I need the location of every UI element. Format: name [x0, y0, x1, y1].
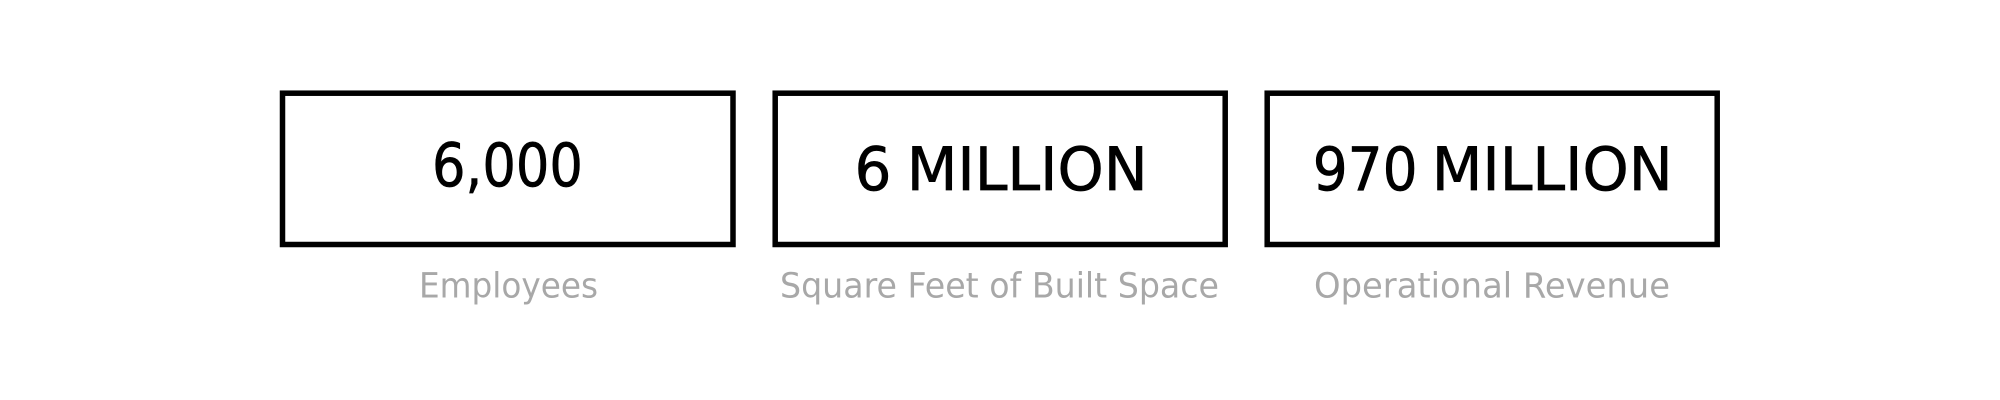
stat box: employees	[282, 93, 733, 244]
stat value: 6 million: 6	[854, 135, 892, 205]
stat box: operational revenue	[1267, 93, 1717, 244]
stat value: 6 million: MILLION	[907, 135, 1148, 205]
stat box: built space	[775, 93, 1225, 244]
stat value: 6,000: 6,000	[432, 131, 583, 201]
panel: built space	[775, 93, 1225, 306]
stat label: operational revenue: Operational Revenue	[1314, 266, 1670, 306]
stat label: employees: Employees	[419, 266, 598, 306]
stat value: 970 million	[1313, 135, 1673, 205]
stat value: 970 million: MILLION	[1432, 135, 1673, 205]
stat value: 970 million: 970	[1313, 135, 1418, 205]
stat label: built space: Square Feet of Built Space	[780, 266, 1219, 306]
panel: employees	[282, 93, 733, 306]
panel: operational revenue	[1267, 93, 1717, 306]
